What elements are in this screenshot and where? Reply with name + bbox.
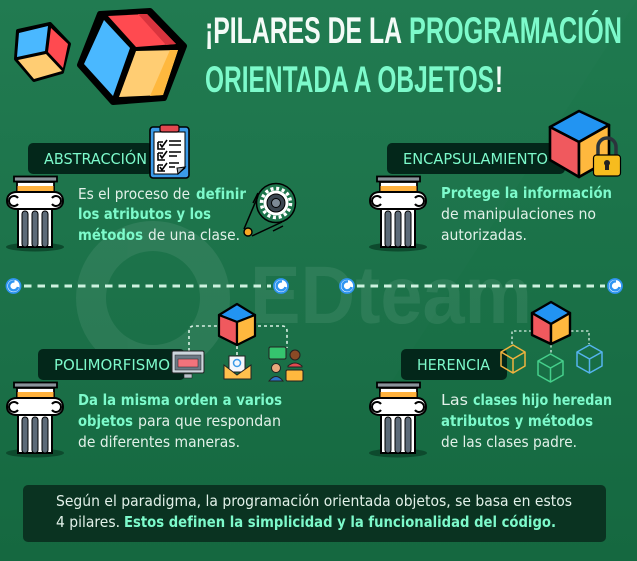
title: ¡PILARES DE LA bbox=[205, 10, 402, 51]
icon: column bbox=[369, 382, 427, 458]
text: abstracción: definir bbox=[196, 185, 247, 203]
label: herencia: HERENCIA bbox=[417, 356, 490, 374]
text: encapsulamiento: autorizadas. bbox=[441, 226, 527, 244]
text: herencia bbox=[441, 391, 612, 451]
connector lines bbox=[512, 331, 589, 354]
panel: abstracción bbox=[6, 125, 296, 252]
panel: encapsulamiento bbox=[369, 111, 620, 252]
callout: summary bbox=[23, 485, 606, 542]
icon: column bbox=[6, 176, 64, 252]
text: polimorfismo: para que respondan bbox=[138, 412, 281, 430]
text: abstracción: Es el proceso de bbox=[78, 185, 190, 203]
icon: clipboard checklist bbox=[150, 125, 189, 178]
icon: column bbox=[369, 176, 427, 252]
text: herencia: de las clases padre. bbox=[441, 433, 577, 451]
text: herencia: Las bbox=[441, 391, 468, 409]
label: abstracción: ABSTRACCIÓN bbox=[44, 149, 147, 168]
icon: large cube bbox=[80, 11, 184, 102]
label: abstracción bbox=[28, 143, 153, 174]
title: ORIENTADA A OBJETOS bbox=[205, 59, 494, 100]
text: abstracción bbox=[78, 185, 247, 244]
connector lines bbox=[189, 326, 287, 355]
callout: summary: Estos definen la simplicidad y la funcionalidad del código. bbox=[124, 513, 556, 531]
title bbox=[205, 9, 622, 100]
text: abstracción: de una clase. bbox=[148, 226, 240, 244]
label: herencia bbox=[401, 349, 507, 380]
label: polimorfismo: POLIMORFISMO bbox=[54, 356, 170, 374]
text: encapsulamiento bbox=[441, 184, 612, 244]
text: herencia: atributos y métodos bbox=[441, 412, 593, 430]
text: polimorfismo: Da la misma orden a varios bbox=[78, 391, 282, 409]
callout: summary: Según el paradigma, la programación orientada objetos, se basa en estos bbox=[56, 492, 572, 510]
icon: small cube bbox=[16, 24, 69, 80]
text: polimorfismo: de diferentes maneras. bbox=[78, 433, 240, 451]
title: ! bbox=[495, 59, 503, 100]
text: polimorfismo: objetos bbox=[78, 412, 133, 430]
icon: blue child cube bbox=[577, 345, 602, 373]
text: herencia: clases hijo heredan bbox=[473, 391, 612, 409]
watermark: EDteam logo: EDteam bbox=[250, 250, 532, 341]
icon: yellow child cube bbox=[501, 345, 525, 373]
text: encapsulamiento: Protege la información bbox=[441, 184, 612, 202]
panel: polimorfismo bbox=[6, 304, 303, 458]
icon: cube with padlock bbox=[550, 111, 620, 177]
icon: envelope bbox=[224, 356, 251, 379]
label: polimorfismo bbox=[38, 349, 185, 380]
callout: summary: 4 pilares. bbox=[56, 513, 120, 531]
icon: cube bbox=[219, 304, 255, 345]
panel: herencia bbox=[369, 302, 612, 458]
icon: column bbox=[6, 382, 64, 458]
icon: parent cube bbox=[532, 302, 570, 344]
text: abstracción: métodos bbox=[78, 226, 143, 244]
label: encapsulamiento bbox=[387, 143, 565, 174]
icon: monitor bbox=[172, 351, 204, 378]
label: encapsulamiento: ENCAPSULAMIENTO bbox=[403, 150, 548, 168]
icon: green child cube bbox=[538, 354, 563, 382]
text: abstracción: los atributos y los bbox=[78, 205, 211, 223]
divider: left dashed connector bbox=[6, 279, 288, 293]
divider: right dashed connector bbox=[340, 279, 622, 293]
text: encapsulamiento: de manipulaciones no bbox=[441, 205, 596, 223]
watermark: EDteam logo bbox=[91, 236, 532, 360]
text: polimorfismo bbox=[78, 391, 282, 451]
icon: gear and belt bbox=[244, 184, 296, 236]
icon: people chatting bbox=[269, 347, 303, 381]
